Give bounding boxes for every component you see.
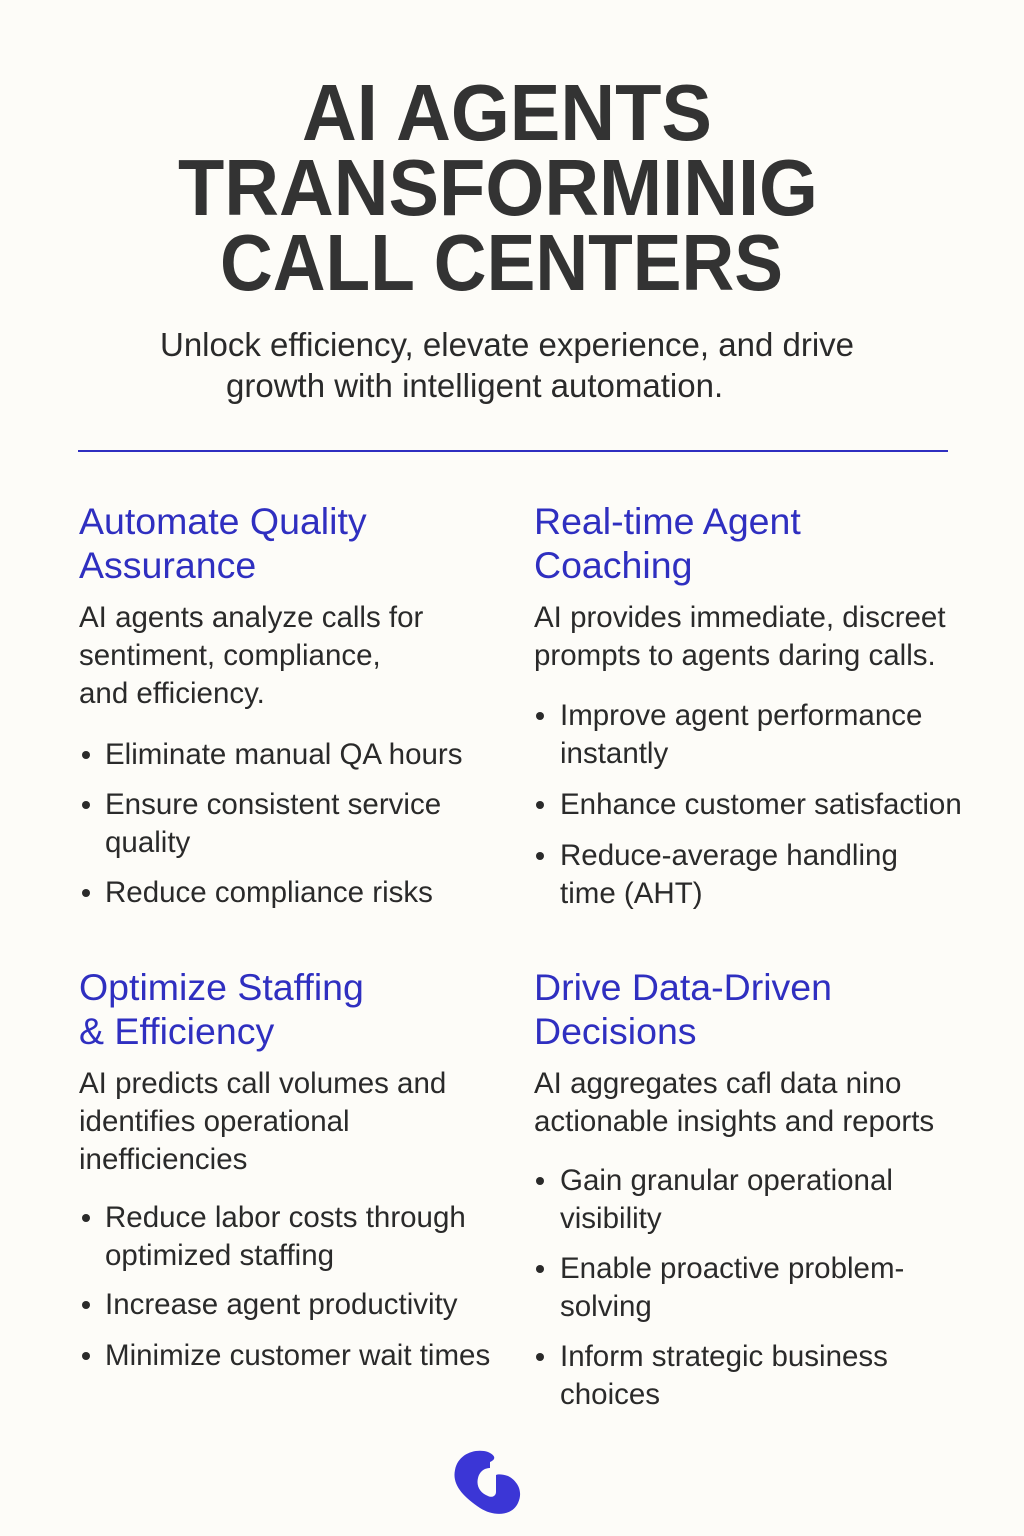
bullets: Enhance customer satisfaction: [560, 788, 962, 821]
bullets: visibility: [560, 1202, 662, 1235]
description: prompts to agents daring calls.: [534, 639, 936, 672]
bullets: Increase agent productivity: [105, 1288, 458, 1321]
heading: Decisions: [534, 1010, 697, 1052]
bullets: [536, 699, 962, 910]
description: actionable insights and reports: [534, 1105, 934, 1138]
title: [178, 68, 818, 307]
description: [534, 1067, 934, 1138]
heading: [79, 500, 367, 586]
panel: data-driven decisions: [534, 966, 934, 1411]
heading: Real-time Agent: [534, 500, 801, 542]
title: TRANSFORMINIG: [178, 143, 818, 232]
heading: Automate Quality: [79, 500, 367, 542]
heading: Optimize Staffing: [79, 966, 364, 1008]
description: identifies operational: [79, 1105, 350, 1138]
bullets: [82, 1201, 490, 1372]
description: AI agents analyze calls for: [79, 601, 423, 634]
description: and efficiency.: [79, 677, 265, 710]
heading: & Efficiency: [79, 1010, 274, 1052]
bullets: Reduce labor costs through: [105, 1201, 466, 1234]
heading: Assurance: [79, 544, 256, 586]
title: CALL CENTERS: [220, 218, 783, 307]
bullets: [536, 1164, 904, 1411]
panel: automate quality assurance: [79, 500, 462, 909]
bullets: Ensure consistent service: [105, 788, 441, 821]
description: AI provides immediate, discreet: [534, 601, 946, 634]
bullets: [82, 738, 462, 909]
bullets: Enable proactive problem-: [560, 1252, 904, 1285]
panel: optimize staffing: [79, 966, 490, 1372]
heading: [534, 500, 801, 586]
description: [534, 601, 946, 672]
heading: Drive Data-Driven: [534, 966, 832, 1008]
icon: logo: [454, 1450, 520, 1514]
bullets: time (AHT): [560, 877, 703, 910]
heading: [79, 966, 364, 1052]
bullets: quality: [105, 826, 190, 859]
heading: [534, 966, 832, 1052]
bullets: Inform strategic business: [560, 1340, 888, 1373]
bullets: solving: [560, 1290, 652, 1323]
description: sentiment, compliance,: [79, 639, 381, 672]
title: AI AGENTS: [302, 68, 712, 157]
description: [79, 1067, 446, 1176]
bullets: Gain granular operational: [560, 1164, 893, 1197]
bullets: Minimize customer wait times: [105, 1339, 490, 1372]
bullets: Reduce-average handling: [560, 839, 898, 872]
description: inefficiencies: [79, 1143, 247, 1176]
bullets: Improve agent performance: [560, 699, 922, 732]
description: AI aggregates cafl data nino: [534, 1067, 901, 1100]
bullets: Eliminate manual QA hours: [105, 738, 462, 771]
subtitle: growth with intelligent automation.: [226, 367, 723, 404]
bullets: instantly: [560, 737, 668, 770]
bullets: optimized staffing: [105, 1239, 334, 1272]
bullets: Reduce compliance risks: [105, 876, 433, 909]
panel: real-time agent coaching: [534, 500, 962, 910]
bullets: choices: [560, 1378, 660, 1411]
description: [79, 601, 423, 710]
subtitle: Unlock efficiency, elevate experience, and drive: [160, 326, 854, 363]
heading: Coaching: [534, 544, 692, 586]
description: AI predicts call volumes and: [79, 1067, 446, 1100]
subtitle: [160, 326, 854, 404]
